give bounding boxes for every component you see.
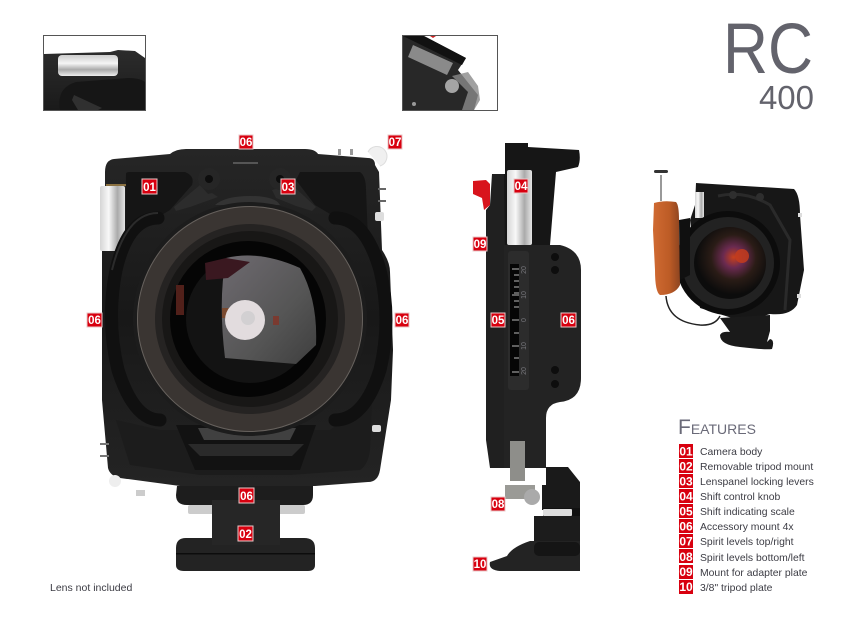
shift indicating scale: 10 [521, 291, 528, 299]
features legend: Lenspanel locking levers [700, 477, 814, 488]
features legend: Mount for adapter plate [700, 568, 808, 579]
camera [690, 183, 804, 322]
callout badges: 06 [240, 137, 252, 149]
callout badges: 03 [282, 182, 294, 194]
features legend: 09 [679, 565, 693, 579]
three-quarter view with wooden grip [653, 170, 804, 349]
shift knob [100, 186, 125, 251]
features legend: 10 [679, 580, 693, 594]
shift indicating scale: 0 [521, 318, 528, 322]
accessory mount rails [111, 218, 160, 420]
title: RC 400: RC [723, 10, 813, 89]
front view of camera [100, 146, 393, 571]
cable [666, 296, 720, 325]
lens [676, 211, 780, 315]
adapter foot [720, 315, 773, 349]
callout badges: 08 [492, 499, 505, 511]
shift knob [507, 170, 532, 245]
features legend: Spirit levels bottom/left [700, 553, 805, 564]
red lever [473, 180, 490, 210]
features legend: 04 [679, 490, 693, 504]
right side hardware [368, 146, 387, 166]
detail photo: spirit levels [402, 36, 498, 110]
title: RC 400 [723, 10, 814, 116]
features legend: 03 [679, 474, 693, 488]
tripod mount [176, 486, 315, 571]
lenspanel locking levers [174, 162, 316, 211]
camera body [102, 149, 393, 486]
features legend: 07 [679, 534, 693, 548]
features legend: 02 [679, 460, 693, 474]
shift scale plate [504, 245, 581, 468]
note: lens not included: Lens not included [50, 582, 132, 594]
callout badges: 02 [239, 529, 252, 541]
features heading: FEATURES [678, 416, 756, 439]
left plate [486, 174, 506, 468]
callout badges [87, 135, 576, 571]
body inner panels [125, 172, 193, 240]
features legend [679, 444, 814, 594]
callout badges: 06 [396, 315, 408, 327]
features legend: 3/8" tripod plate [700, 583, 773, 594]
detail photo: shift knob [44, 36, 146, 110]
shift indicating scale [508, 251, 529, 390]
upper body [503, 143, 580, 245]
callout badges: 06 [240, 491, 253, 503]
features legend: Accessory mount 4x [700, 522, 794, 533]
callout badges: 10 [474, 559, 486, 571]
shift indicating scale: 10 [521, 342, 528, 350]
title: RC 400: 400 [759, 79, 814, 116]
callout badges: 06 [88, 315, 101, 327]
callout badges: 07 [389, 137, 401, 149]
features legend: Camera body [700, 447, 763, 458]
features legend: 08 [679, 550, 693, 564]
callout badges: 04 [515, 181, 528, 193]
shift indicating scale: 20 [521, 367, 528, 375]
wooden handle [653, 201, 680, 295]
callout badges: 09 [474, 239, 486, 251]
features legend: 01 [679, 444, 693, 458]
features legend: 06 [679, 520, 693, 534]
features legend: Removable tripod mount [700, 462, 813, 473]
side view of camera [473, 143, 581, 571]
callout badges: 06 [562, 315, 575, 327]
callout badges: 05 [492, 315, 505, 327]
features legend: 05 [679, 504, 693, 518]
spirit levels and foot [490, 441, 580, 571]
callout badges: 01 [143, 182, 156, 194]
features legend: Spirit levels top/right [700, 537, 794, 548]
shutter release [660, 175, 662, 201]
features legend: Shift control knob [700, 492, 781, 503]
shift indicating scale: 20 [521, 266, 528, 274]
lens [133, 196, 367, 470]
features legend: Shift indicating scale [700, 507, 795, 518]
